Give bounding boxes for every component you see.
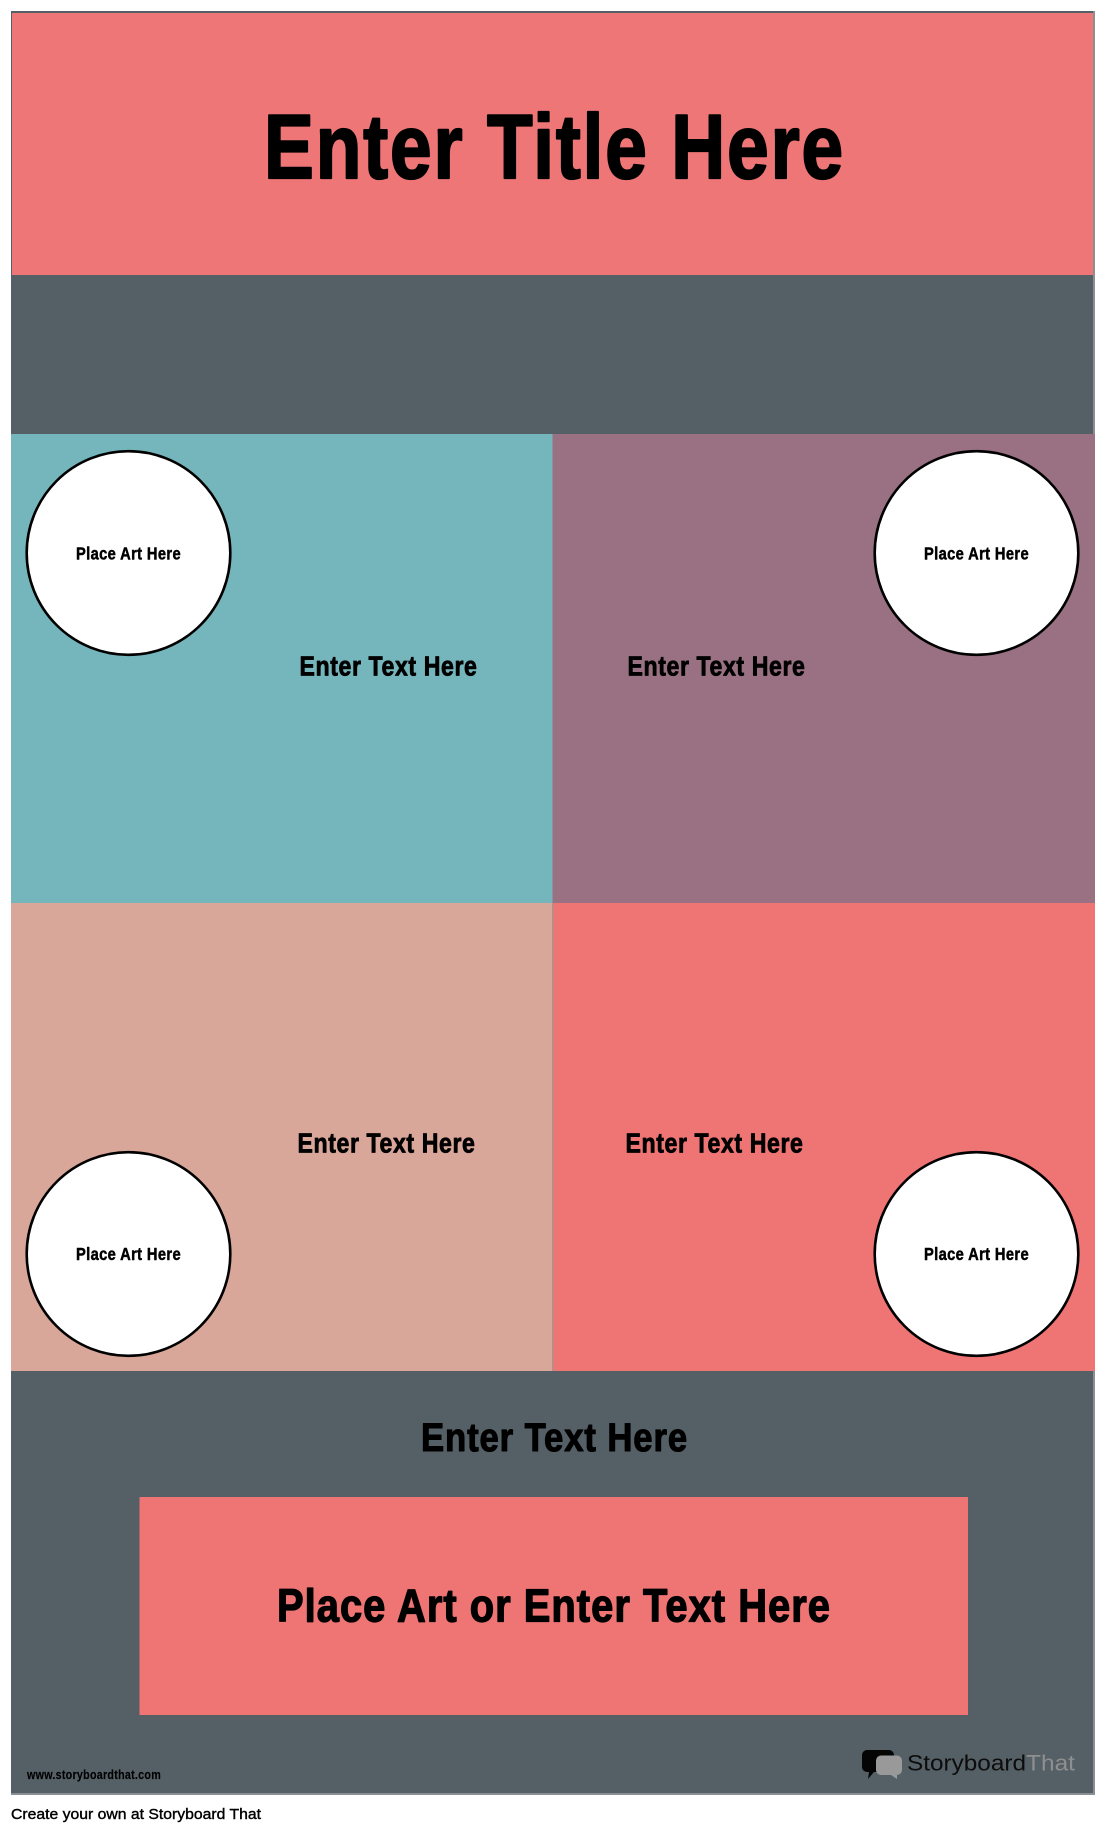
footer credit: Create your own at Storyboard That (11, 1806, 262, 1823)
icon: art placeholder circle top right: Place Art Here (924, 543, 1029, 563)
icon: art placeholder circle top left (27, 451, 230, 655)
panel: art or text box: Place Art or Enter Text Here (277, 1580, 831, 1632)
title: Enter Title Here (264, 97, 845, 198)
logo: Storyboard That (862, 1750, 1075, 1779)
logo: Storyboard That: That (1026, 1751, 1075, 1776)
panel: title banner (12, 13, 1093, 275)
icon: art placeholder circle top right (875, 451, 1078, 655)
icon: art placeholder circle bottom left: Place Art Here (76, 1244, 181, 1264)
panel: bottom left tan (11, 903, 552, 1371)
text block bottom left: Enter Text Here (298, 1128, 476, 1159)
text block top right: Enter Text Here (628, 651, 806, 682)
panel: bottom dark section (11, 1371, 1093, 1793)
heading: bottom section: Enter Text Here (421, 1416, 688, 1460)
icon: art placeholder circle bottom left (27, 1152, 230, 1356)
text block bottom right: Enter Text Here (626, 1128, 804, 1159)
icon: art placeholder circle bottom right: Place Art Here (924, 1244, 1029, 1264)
panel: bottom right coral (552, 903, 1095, 1371)
logo: Storyboard That: Storyboard (907, 1751, 1026, 1776)
panel: top right mauve (552, 434, 1095, 903)
website url: www.storyboardthat.com (26, 1768, 161, 1782)
panel: top left teal (11, 434, 552, 903)
icon: art placeholder circle bottom right (875, 1152, 1078, 1356)
icon: art placeholder circle top left: Place Art Here (76, 543, 181, 563)
panel: dark subtitle band (11, 275, 1093, 434)
icon: speech bubbles (862, 1750, 902, 1779)
panel: art or text box (140, 1497, 968, 1715)
text block top left: Enter Text Here (300, 651, 478, 682)
